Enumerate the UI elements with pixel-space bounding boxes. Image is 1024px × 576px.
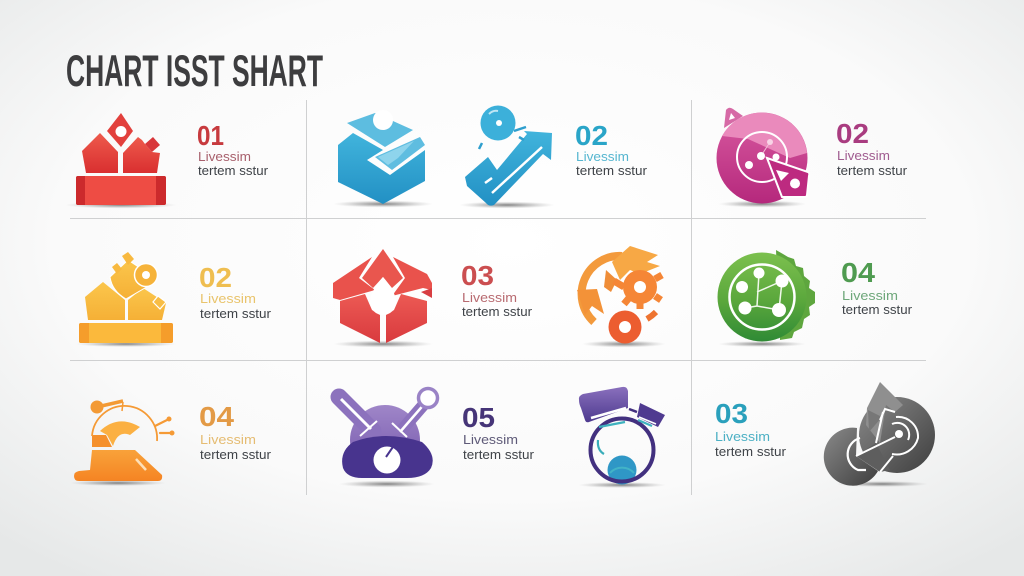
- text: teal 03: Livessim: [715, 429, 770, 444]
- text: magenta 02: Livessim: [837, 148, 890, 163]
- text: red 01: 01: [197, 120, 224, 151]
- panel: teal and grey 03: [715, 382, 935, 487]
- text: red 01: tertem sstur: [198, 163, 269, 178]
- panel: blue icons 02: [333, 106, 648, 208]
- text: orange 04: [199, 401, 272, 462]
- text: blue 02: Livessim: [576, 149, 629, 164]
- panel: magenta 02: [716, 108, 908, 208]
- icon: magenta disc: [716, 108, 809, 208]
- icon: orange machine: [70, 400, 174, 486]
- text: red 03: Livessim: [462, 290, 517, 305]
- text: purple 05: 05: [462, 402, 495, 433]
- text: red 03: tertem sstur: [462, 304, 533, 319]
- icon: red hexagon box: [333, 249, 433, 348]
- panel: red crown 01: [65, 113, 269, 208]
- text: red 03: [461, 260, 533, 319]
- text: green 04: Livessim: [842, 288, 898, 303]
- panel: purple 05: [339, 387, 666, 488]
- text: green 04: [841, 257, 913, 317]
- text: teal 03: 03: [715, 398, 748, 429]
- icon: green gear: [718, 250, 815, 347]
- text: blue 02: tertem sstur: [576, 163, 648, 178]
- icon: grey discs and arrow: [824, 382, 935, 487]
- text: green 04: 04: [841, 257, 875, 288]
- text: orange 04: Livessim: [200, 432, 256, 447]
- text: teal 03: tertem sstur: [715, 444, 787, 459]
- text: purple 05: [462, 402, 535, 462]
- text: purple 05: tertem sstur: [463, 447, 535, 462]
- panel: red and orange 03: [333, 246, 666, 348]
- title: CHART ISST SHART: [66, 47, 323, 96]
- text: teal 03: [715, 398, 787, 459]
- icon: red crown: [65, 113, 177, 208]
- text: magenta 02: 02: [836, 118, 869, 149]
- text: orange 04: 04: [199, 401, 234, 432]
- text: magenta 02: [836, 118, 908, 178]
- text: red 01: [197, 120, 269, 178]
- text: blue 02: [575, 120, 648, 178]
- panel: orange 04: [70, 400, 272, 486]
- panel: green 04: [718, 250, 913, 347]
- text: yellow 02: tertem sstur: [200, 306, 272, 321]
- text: red 01: Livessim: [198, 149, 251, 164]
- text: yellow 02: [199, 262, 272, 321]
- icon: orange globe arrows: [577, 246, 666, 348]
- text: orange 04: tertem sstur: [200, 447, 272, 462]
- text: red 03: 03: [461, 260, 494, 291]
- icon: yellow crown: [76, 252, 176, 347]
- text: magenta 02: tertem sstur: [837, 163, 908, 178]
- icon: purple clamp ring: [578, 387, 666, 488]
- icon: blue arrow: [459, 106, 555, 208]
- text: green 04: tertem sstur: [842, 302, 913, 317]
- text: blue 02: 02: [575, 120, 608, 151]
- text: yellow 02: 02: [199, 262, 232, 293]
- text: purple 05: Livessim: [463, 432, 518, 447]
- icon: blue box: [333, 110, 433, 208]
- text: yellow 02: Livessim: [200, 291, 256, 306]
- panel: yellow 02: [76, 252, 272, 347]
- icon: purple dial: [339, 388, 438, 488]
